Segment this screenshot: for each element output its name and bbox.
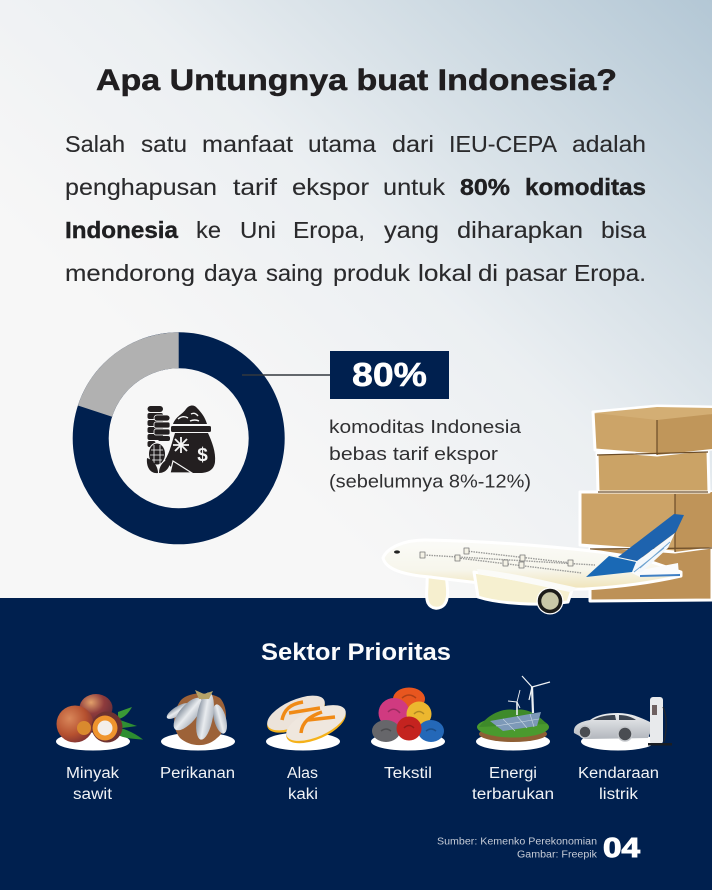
intro paragraph: Uni <box>240 217 276 243</box>
navy bottom panel <box>0 598 712 890</box>
title: Apa Untungnya buat Indonesia? <box>96 64 617 97</box>
source credits: Sumber: Kemenko Perekonomian <box>437 836 597 848</box>
intro paragraph: Salah <box>65 131 125 157</box>
tail fin <box>618 514 684 561</box>
window rows <box>420 548 595 573</box>
heading: Sektor Prioritas: Sektor Prioritas <box>261 639 451 666</box>
icon: commodities <box>147 405 215 473</box>
intro paragraph: yang <box>384 217 439 243</box>
intro paragraph <box>65 131 647 286</box>
illustration: cardboard boxes <box>580 406 712 601</box>
source credits <box>437 836 597 860</box>
label: Kendaraan <box>578 765 659 782</box>
front landing gear <box>427 574 448 608</box>
intro paragraph: IEU-CEPA <box>449 131 557 157</box>
intro paragraph: diharapkan <box>457 217 583 243</box>
wind turbines <box>508 676 550 715</box>
callout: 80%: 80% <box>352 356 427 393</box>
sector: Alas kaki <box>262 689 351 803</box>
label: kaki <box>288 786 318 803</box>
callout description: komoditas Indonesia <box>329 416 522 437</box>
background gradient <box>0 0 712 600</box>
label: sawit <box>73 786 113 803</box>
intro paragraph: Eropa. <box>574 260 646 286</box>
intro paragraph: lokal <box>418 260 472 286</box>
label: Perikanan <box>160 765 235 782</box>
label: Energi <box>489 765 537 782</box>
label <box>472 765 554 803</box>
label <box>578 765 659 803</box>
intro paragraph: manfaat <box>202 131 293 157</box>
label <box>66 765 119 803</box>
label: Alas <box>287 765 318 782</box>
intro paragraph: satu <box>141 131 187 157</box>
donut chart: 80% <box>78 332 267 526</box>
main wheel <box>536 588 564 614</box>
intro paragraph: untuk <box>383 174 445 200</box>
connector line <box>242 374 330 376</box>
label: Tekstil <box>384 765 432 782</box>
callout description <box>329 416 531 492</box>
intro paragraph: saing <box>266 260 323 286</box>
intro paragraph: mendorong <box>65 260 195 286</box>
intro paragraph: 80% <box>460 174 510 200</box>
intro paragraph: ekspor <box>292 174 369 200</box>
label: terbarukan <box>472 786 554 803</box>
intro paragraph: komoditas <box>525 174 646 200</box>
engine block <box>474 572 572 604</box>
tail tip <box>630 563 679 577</box>
intro paragraph: pasar <box>505 260 567 286</box>
tail root <box>586 556 636 577</box>
intro paragraph: bisa <box>601 217 647 243</box>
intro paragraph: produk <box>333 260 410 286</box>
intro paragraph: Indonesia <box>65 217 179 243</box>
intro paragraph: dari <box>392 131 434 157</box>
intro paragraph: daya <box>204 260 258 286</box>
intro paragraph: penghapusan <box>65 174 217 200</box>
intro paragraph: adalah <box>572 131 646 157</box>
nose window <box>394 550 400 554</box>
sector: Kendaraan listrik <box>574 697 672 803</box>
sector: Energi terbarukan <box>472 676 554 803</box>
wing <box>477 569 578 592</box>
illustration: airplane <box>383 514 684 614</box>
intro paragraph: ke <box>196 217 221 243</box>
sector: Perikanan <box>160 690 235 782</box>
intro paragraph: di <box>478 260 498 286</box>
intro paragraph: Eropa, <box>293 217 365 243</box>
grey 20% segment <box>78 332 179 417</box>
label: Minyak <box>66 765 119 782</box>
sector: Tekstil <box>371 688 445 782</box>
callout description: bebas tarif ekspor <box>329 443 498 464</box>
intro paragraph: tarif <box>233 174 278 200</box>
source credits: Gambar: Freepik <box>517 850 597 860</box>
label: listrik <box>599 786 638 803</box>
page number: 04 <box>603 832 640 863</box>
icon: commodities: $ <box>197 445 208 466</box>
sector: Minyak sawit <box>56 694 143 803</box>
callout description: (sebelumnya 8%-12%) <box>329 470 531 492</box>
label <box>287 765 318 803</box>
fuselage <box>383 540 681 589</box>
callout: 80% <box>330 351 449 399</box>
intro paragraph: utama <box>308 131 377 157</box>
